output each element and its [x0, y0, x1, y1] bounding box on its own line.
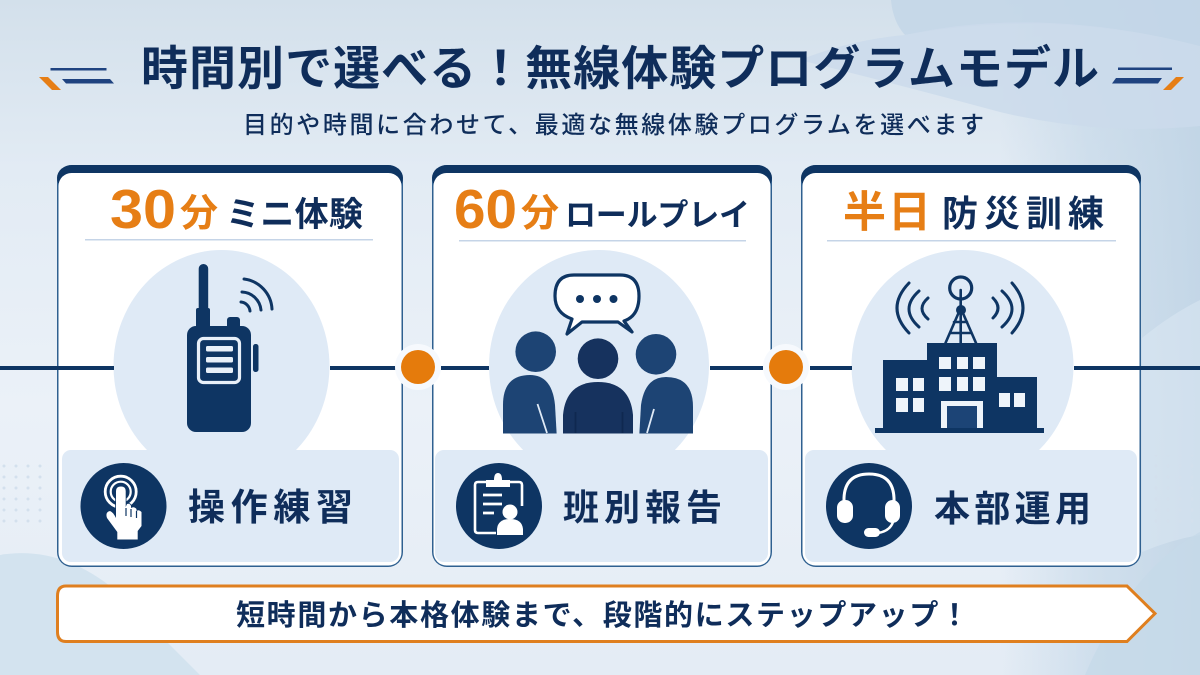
title decoration left	[39, 68, 114, 90]
heading: 60分ロールプレイ: 60	[454, 178, 517, 240]
icon: three people talking	[503, 275, 693, 440]
icon: handheld radio	[187, 264, 272, 432]
heading: 60分ロールプレイ	[454, 178, 750, 240]
banner text: 短時間から本格体験まで、段階的にステップアップ！	[236, 599, 969, 632]
panel: 30分 ミニ体験	[57, 165, 403, 567]
connector dot 1	[395, 344, 441, 390]
connector dot 2	[763, 344, 809, 390]
bottom arrow banner	[58, 586, 1155, 642]
sub panel: 操作練習	[62, 450, 399, 562]
heading: 30分ミニ体験: ミニ体験	[226, 196, 363, 234]
label: 操作練習: 操作練習	[188, 487, 353, 528]
heading: 30分ミニ体験: 分	[180, 193, 218, 235]
icon: touch hand	[105, 476, 142, 540]
sub panel: 本部運用	[805, 450, 1137, 562]
connector line	[0, 366, 1200, 370]
title: 時間別で選べる！無線体験プログラムモデル	[141, 42, 1099, 95]
heading: 半日防災訓練	[843, 189, 1104, 237]
heading: 半日防災訓練: 防災訓練	[942, 193, 1104, 234]
heading: 60分ロールプレイ: 分	[521, 193, 559, 235]
heading: 半日防災訓練: 半日	[843, 189, 931, 237]
panel: 60分 ロールプレイ	[432, 165, 772, 567]
panel: 半日 防災訓練	[801, 165, 1141, 567]
heading: 60分ロールプレイ: ロールプレイ	[565, 198, 750, 233]
icon backdrop circle	[489, 250, 709, 450]
icon: headset	[837, 474, 900, 537]
title decoration right	[1112, 68, 1184, 90]
icon: headquarters building with antenna	[875, 277, 1044, 433]
heading: 30分ミニ体験	[110, 178, 363, 240]
label: 班別報告: 班別報告	[563, 487, 722, 528]
icon backdrop circle	[852, 250, 1074, 450]
label: 本部運用: 本部運用	[934, 488, 1091, 529]
subtitle: 目的や時間に合わせて、最適な無線体験プログラムを選べます	[243, 112, 984, 139]
icon: clipboard with person	[475, 473, 523, 535]
sub panel: 班別報告	[435, 450, 768, 562]
icon backdrop circle	[114, 250, 330, 450]
heading: 30分ミニ体験: 30	[110, 178, 176, 240]
